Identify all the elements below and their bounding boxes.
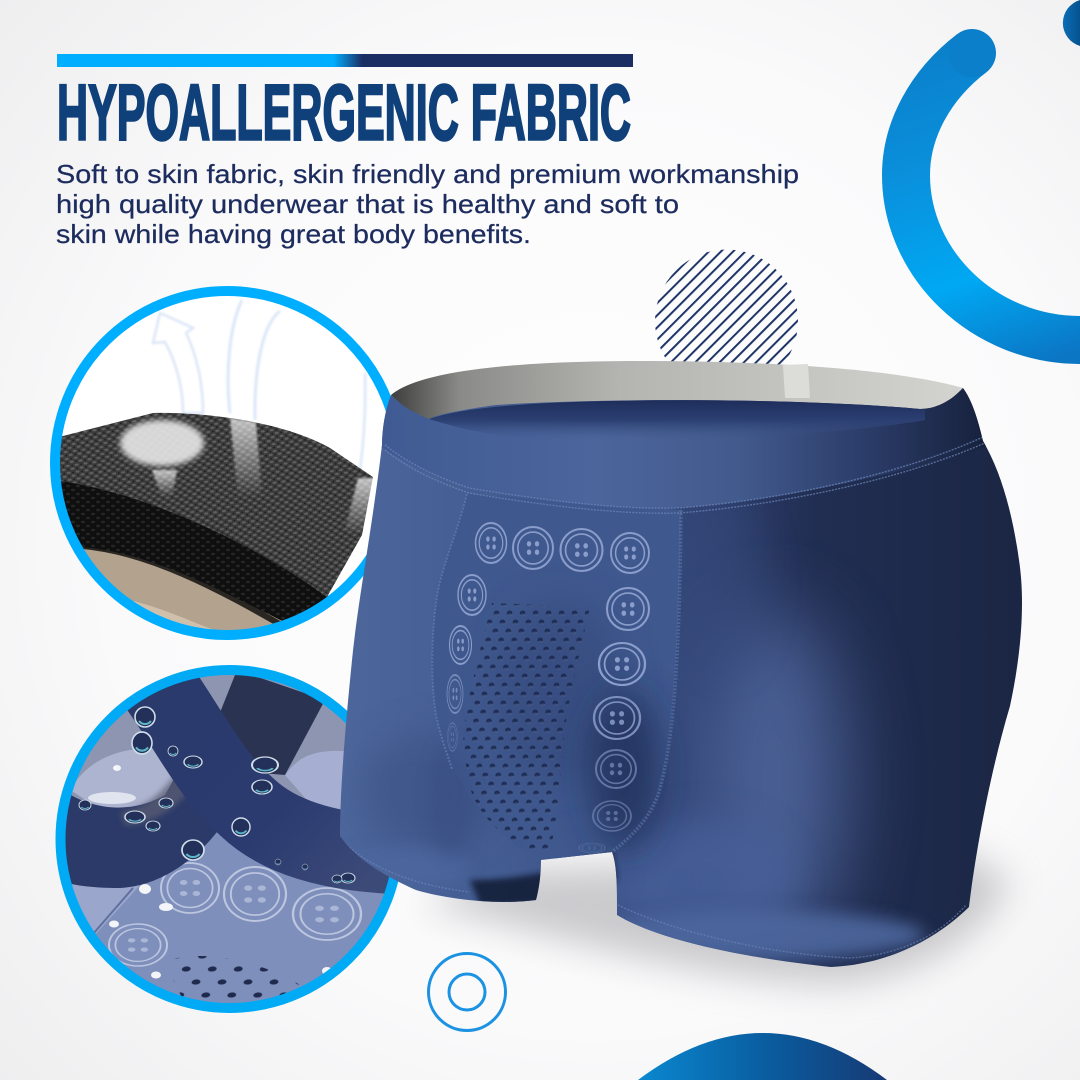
bottom hem highlights — [595, 911, 925, 959]
ground shadow — [420, 850, 1010, 985]
description text — [56, 159, 799, 249]
grey backdrop behind straps — [72, 675, 346, 800]
perforation dot grid — [463, 603, 589, 850]
product: boxer briefs — [330, 350, 1040, 990]
printed button rings — [447, 523, 649, 853]
soft shading on the right — [360, 490, 845, 950]
waistband stitching — [385, 437, 985, 513]
moisture blob — [120, 420, 204, 466]
back fabric strap, upper — [220, 675, 323, 775]
dark strip over tan — [83, 546, 283, 626]
waistband interior — [391, 361, 963, 425]
front waistband — [378, 388, 990, 508]
title: HYPOALLERGENIC FABRIC — [57, 68, 631, 156]
description text: high quality underwear that is healthy and soft to — [56, 189, 679, 219]
icon: airflow arrows — [153, 300, 365, 470]
inner waist shadow — [430, 400, 925, 434]
brief body — [340, 388, 1022, 967]
printed button rings — [109, 863, 361, 966]
tan backing layer — [82, 547, 282, 630]
hem stitching — [342, 840, 966, 958]
blue semicircle, bottom edge — [638, 1033, 887, 1080]
lit strap highlight — [120, 775, 190, 825]
accent bar above title — [57, 54, 633, 67]
front fabric strap — [145, 668, 395, 855]
big blue arc, top right — [906, 29, 1080, 340]
striped circle decoration — [655, 250, 798, 392]
lighter tan strip — [132, 600, 212, 630]
back fabric strap, lower left — [66, 780, 217, 888]
panel: water-repellent fabric close-up — [55, 665, 405, 1020]
back waistband seam highlight — [783, 364, 810, 398]
perforation dots — [174, 956, 300, 998]
shadow under crotch — [470, 850, 617, 905]
black mesh side — [55, 480, 330, 625]
panel: breathable fabric close-up — [50, 291, 399, 660]
water droplets — [79, 707, 355, 978]
description text: Soft to skin fabric, skin friendly and premium workmanship — [56, 159, 799, 189]
seam on fabric — [93, 888, 133, 934]
steam wisps — [152, 418, 375, 535]
lighter fabric, lower left — [72, 884, 140, 934]
description text: skin while having great body benefits. — [56, 219, 531, 249]
blue dot, top right — [1063, 0, 1080, 46]
light fabric folds — [72, 748, 173, 808]
pouch panel — [432, 494, 681, 858]
small concentric ring decoration — [428, 954, 506, 1030]
seam stitching — [432, 494, 681, 852]
dark weave top surface — [55, 413, 373, 597]
